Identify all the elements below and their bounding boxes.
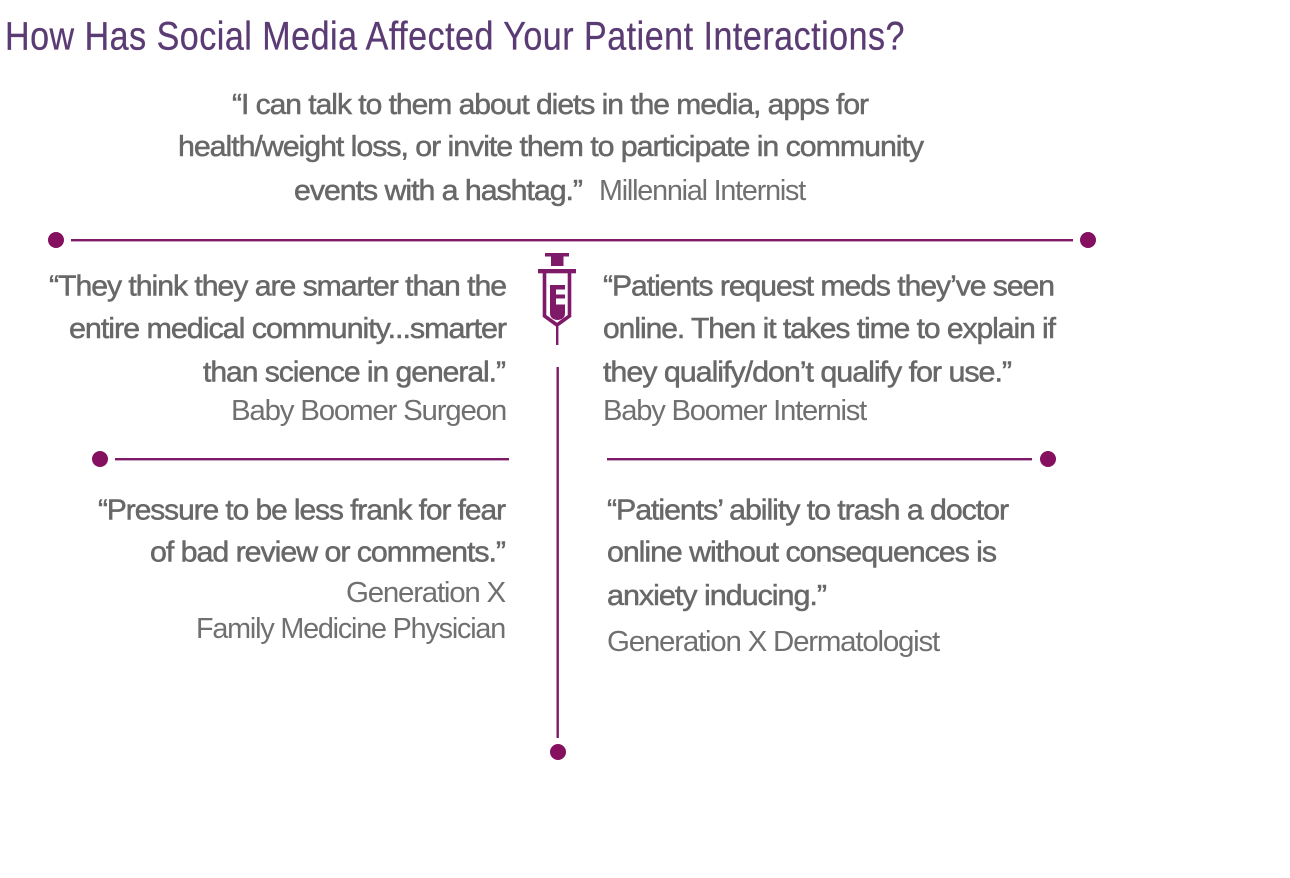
- left divider with dot: [92, 451, 509, 467]
- quote: baby boomer internist: they qualify/don’t qualify for use.”: [603, 356, 1011, 388]
- quote: millennial internist: Millennial Internist: [599, 175, 806, 207]
- quote: generation x dermatologist: Generation X Dermatologist: [607, 626, 940, 658]
- quote: baby boomer surgeon: than science in general.”: [203, 356, 505, 388]
- quote: millennial internist: “I can talk to them about diets in the media, apps for: [232, 89, 869, 121]
- quote: generation x dermatologist: online without consequences is: [607, 536, 997, 568]
- quote: generation x family medicine physician: of bad review or comments.”: [150, 536, 505, 568]
- quote: millennial internist: health/weight loss, or invite them to participate in community: [178, 131, 925, 163]
- quote: millennial internist: events with a hashtag.”: [294, 175, 582, 207]
- quote: generation x family medicine physician: Generation X: [346, 577, 506, 609]
- quote: baby boomer surgeon: entire medical community...smarter: [69, 313, 507, 345]
- quote: millennial internist: [178, 89, 925, 207]
- icon: syringe: [538, 253, 576, 345]
- vertical divider with end dot: [550, 367, 566, 760]
- quote: baby boomer surgeon: Baby Boomer Surgeon: [231, 395, 506, 427]
- quote: baby boomer internist: online. Then it takes time to explain if: [603, 313, 1057, 345]
- quote: baby boomer internist: [603, 270, 1057, 427]
- quote: generation x family medicine physician: [98, 494, 506, 645]
- quote: generation x dermatologist: “Patients’ ability to trash a doctor: [607, 494, 1009, 526]
- quote: baby boomer surgeon: “They think they are smarter than the: [49, 270, 506, 302]
- quote: generation x family medicine physician: “Pressure to be less frank for fear: [98, 494, 506, 526]
- quote: baby boomer internist: Baby Boomer Internist: [603, 395, 867, 427]
- quote: generation x family medicine physician: Family Medicine Physician: [196, 613, 505, 645]
- right divider with dot: [607, 451, 1056, 467]
- top divider with end dots: [48, 232, 1096, 248]
- quote: generation x dermatologist: anxiety inducing.”: [607, 580, 826, 612]
- quote: baby boomer surgeon: [49, 270, 507, 427]
- quote: generation x dermatologist: [607, 494, 1009, 658]
- title: How Has Social Media Affected Your Patient Interactions?: [5, 14, 905, 58]
- quote: baby boomer internist: “Patients request meds they’ve seen: [603, 270, 1054, 302]
